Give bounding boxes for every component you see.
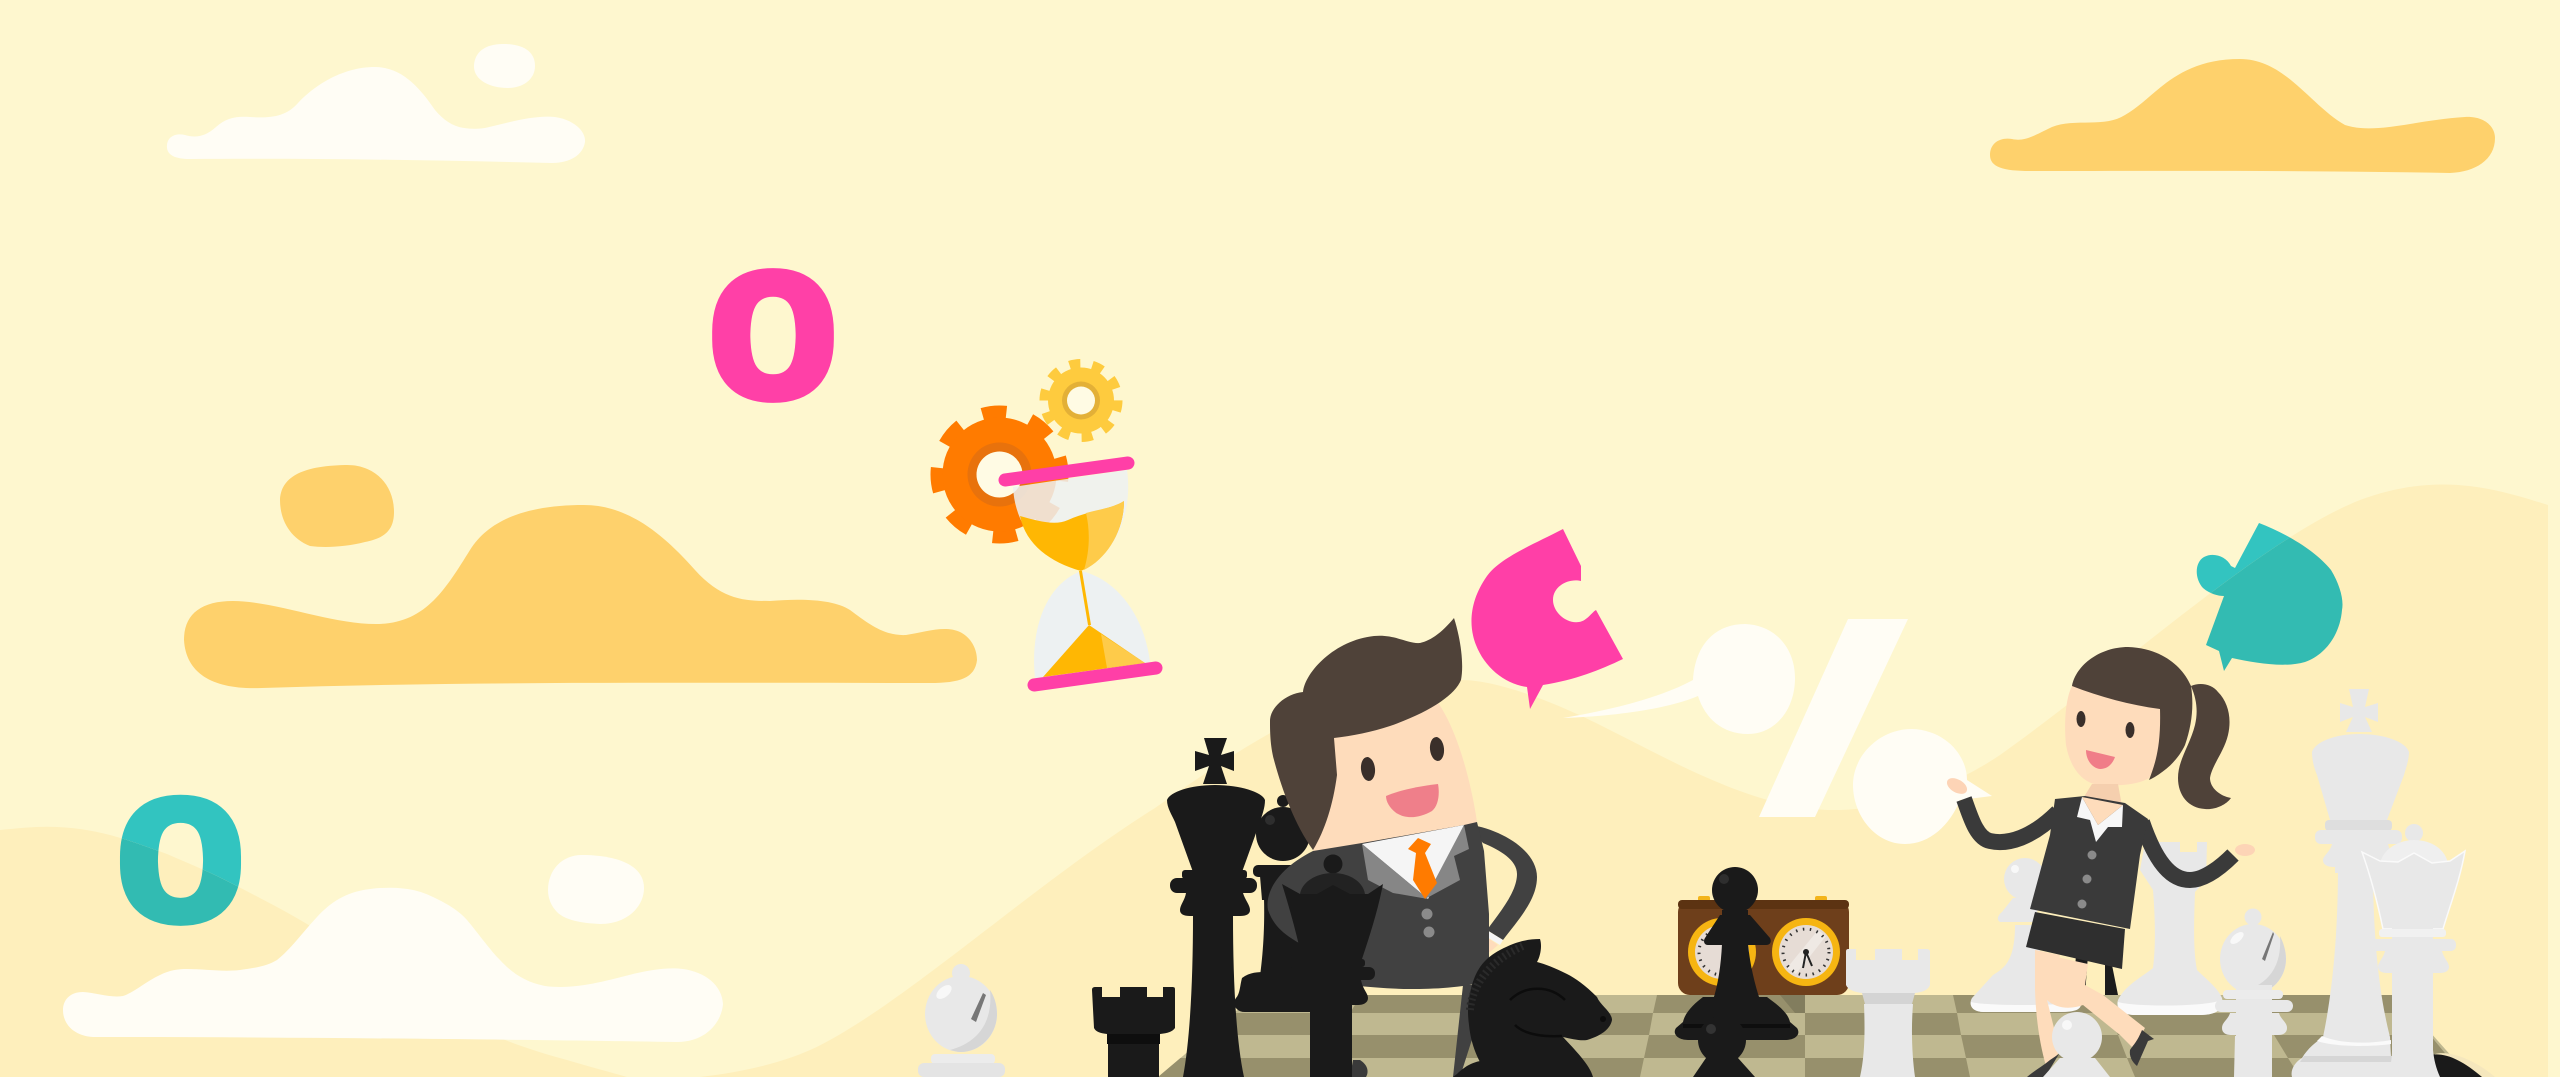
black king: neck backing bbox=[1193, 868, 1233, 920]
woman: left hand bbox=[1944, 775, 1970, 797]
black king: cross bbox=[1195, 738, 1234, 784]
woman: head bbox=[2065, 686, 2162, 785]
percent: upper speech bubble bbox=[1563, 624, 1795, 734]
percent sign bbox=[1563, 619, 1992, 844]
man: arm bbox=[1465, 824, 1537, 940]
black queen: crown bbox=[1282, 884, 1383, 959]
woman: jacket bbox=[2030, 796, 2148, 929]
cloud puff: orange small bbox=[280, 465, 394, 547]
man: legs bbox=[1453, 985, 1476, 1077]
man: hand bbox=[1476, 932, 1498, 952]
clock: shadow on board bbox=[1780, 995, 1805, 1013]
black knight bbox=[1453, 939, 1612, 1077]
chess clock bbox=[1678, 896, 1849, 1013]
gear: orange bbox=[923, 398, 1076, 551]
chessboard bbox=[1140, 995, 2480, 1077]
white king: cross bbox=[2340, 689, 2378, 732]
man: eyes bbox=[1360, 756, 1376, 782]
black king: crown bbox=[1167, 785, 1265, 872]
cloud: orange top right bbox=[1990, 59, 2495, 173]
clock: case bbox=[1678, 900, 1849, 995]
white queen: neck backing bbox=[2392, 925, 2433, 980]
woman: mouth bbox=[2086, 750, 2115, 769]
clock: left dial bbox=[1688, 918, 1756, 986]
small white bishop, far left bbox=[918, 964, 1005, 1077]
black queen: stem bbox=[1310, 1005, 1352, 1077]
man: right lapel bbox=[1425, 825, 1469, 899]
white queen: finial bbox=[2405, 824, 2423, 842]
background hills bbox=[0, 484, 2548, 1077]
hourglass: bottom bar bbox=[1034, 668, 1156, 685]
woman: ponytail bbox=[2178, 684, 2231, 809]
hourglass: top bar bbox=[1005, 463, 1128, 480]
hourglass: upper sand bbox=[1020, 501, 1124, 571]
man: tie bbox=[1408, 838, 1437, 899]
man: buttons bbox=[1422, 908, 1434, 938]
black king: stem bbox=[1183, 916, 1244, 1077]
number zero: teal shaded by hill: 0 bbox=[110, 768, 251, 959]
man: body bbox=[1268, 822, 1489, 989]
woman: hair bbox=[2072, 647, 2192, 780]
cloud puff: white small bbox=[474, 44, 535, 88]
dark furniture behind woman's legs bbox=[2073, 955, 2118, 995]
white queen bbox=[2362, 824, 2465, 1077]
cloud puff: white lower bbox=[548, 855, 644, 924]
gear: yellow bbox=[1044, 364, 1118, 438]
clock: buttons bbox=[1698, 896, 1710, 905]
white king: collar bbox=[2325, 820, 2392, 831]
man: hair bbox=[1270, 618, 1462, 850]
hourglass: sand stream bbox=[1079, 571, 1091, 625]
black pawn, front bbox=[1693, 1016, 1755, 1077]
woman: neck bbox=[2082, 784, 2122, 806]
black queen bbox=[1282, 854, 1383, 1077]
woman: ear bbox=[2149, 732, 2163, 746]
man bbox=[1268, 618, 1537, 1077]
woman: eyes bbox=[2076, 711, 2086, 727]
puzzle speech bubble: teal bbox=[2197, 523, 2343, 671]
woman: right shoe bbox=[2130, 1030, 2154, 1066]
man: head bbox=[1313, 700, 1477, 851]
woman: skirt bbox=[2026, 912, 2125, 969]
white queen: crown bbox=[2362, 851, 2465, 929]
black rook bbox=[1092, 987, 1175, 1077]
white king: crown bbox=[2312, 734, 2409, 820]
clock: right dial bbox=[1772, 918, 1840, 986]
black bishop behind man bbox=[1234, 795, 1312, 1012]
man: mouth bbox=[1386, 784, 1439, 817]
white queen: dome bbox=[2380, 840, 2448, 864]
puzzle speech bubble: pink bbox=[1471, 529, 1623, 709]
white king bbox=[2292, 689, 2409, 1077]
hourglass bbox=[1005, 463, 1156, 685]
percent: slash bbox=[1759, 619, 1908, 817]
cloud: orange middle left bbox=[184, 465, 977, 688]
black queen: neck backing bbox=[1310, 955, 1352, 1010]
man: cuff bbox=[1482, 929, 1503, 945]
woman: jacket buttons bbox=[2078, 850, 2096, 908]
white rook, centre bbox=[1846, 949, 1930, 1077]
man: left lapel bbox=[1362, 844, 1428, 899]
man: ear bbox=[1317, 770, 1335, 792]
woman: left arm bbox=[1964, 799, 2058, 842]
woman: neckline bbox=[2082, 797, 2123, 825]
woman: right arm bbox=[2142, 822, 2233, 880]
black king bbox=[1167, 738, 1265, 1077]
percent: lower speech bubble bbox=[1853, 729, 1992, 844]
cloud: white top left bbox=[167, 44, 585, 163]
white pawn behind woman bbox=[1971, 858, 2082, 1012]
woman bbox=[1944, 647, 2255, 1077]
dark knight, bottom right bbox=[2430, 1053, 2495, 1077]
puzzle speech bubble: teal shaded by hill bbox=[2206, 538, 2342, 671]
black knight: mane lines bbox=[1470, 945, 1525, 1010]
white king: neck backing bbox=[2335, 815, 2385, 873]
white bishop, right bbox=[2215, 908, 2293, 1077]
cloud: white bottom left bbox=[63, 855, 723, 1042]
number zero: teal: 0 bbox=[110, 768, 251, 959]
woman: left shoe bbox=[2027, 1054, 2059, 1077]
black pawn on clock bbox=[1675, 867, 1798, 1040]
white king: stem bbox=[2292, 867, 2392, 1077]
man: shirt bbox=[1362, 825, 1464, 899]
woman: legs bbox=[2035, 950, 2145, 1066]
hourglass: upper glass bbox=[1013, 470, 1128, 571]
woman: right hand bbox=[2235, 844, 2255, 856]
hourglass: lower sand bbox=[1043, 625, 1145, 677]
number zero: pink: 0 bbox=[702, 241, 844, 438]
woman: collar bbox=[2077, 797, 2123, 842]
black queen: dome bbox=[1300, 873, 1365, 894]
black knight: jaw shadow bbox=[1510, 989, 1565, 1036]
white rook behind woman bbox=[2117, 842, 2223, 1015]
white pawn, front of woman bbox=[2043, 1012, 2110, 1077]
black queen: finial bbox=[1324, 854, 1342, 874]
man: shoe bbox=[1350, 1060, 1368, 1077]
